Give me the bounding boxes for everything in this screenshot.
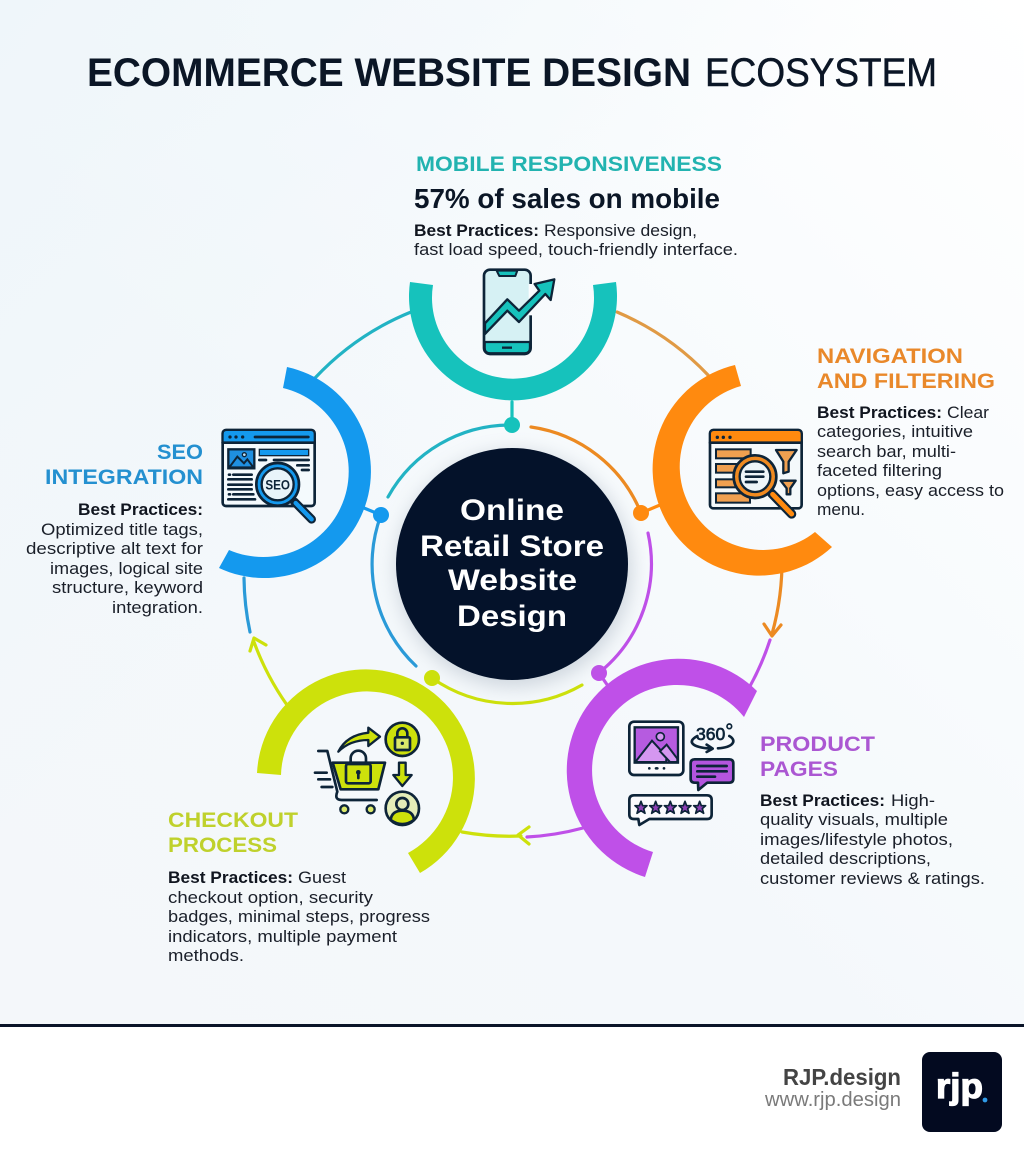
icon: SEO browser window: SEO [265,476,290,492]
panel: checkout process text: CHECKOUT [168,809,298,832]
panel: checkout process text [168,809,430,965]
panel: navigation and filtering text: search bar, multi- [817,442,956,461]
footer [0,1024,1024,1154]
panel: navigation and filtering text: NAVIGATION [817,345,963,368]
panel: checkout process text: Best Practices: [168,868,293,887]
arc: product pages [567,659,757,877]
panel: navigation and filtering text: AND FILTERING [817,370,995,393]
icon: phone with rising chart [484,270,554,354]
panel: mobile responsiveness text: MOBILE RESPONSIVENESS [416,153,722,176]
central hub [396,448,632,687]
panel: mobile responsiveness text: fast load speed, touch-friendly interface. [414,240,738,259]
panel: SEO integration text: integration. [112,598,203,617]
panel: navigation and filtering text: options, easy access to [817,481,1004,500]
panel: navigation and filtering text: faceted filtering [817,461,942,480]
central hub: Online [460,494,564,527]
panel: product pages text [760,733,985,888]
panel: mobile responsiveness text: Best Practices: [414,221,539,240]
arc: navigation and filtering [653,365,832,576]
panel: SEO integration text: Optimized title tags, [41,520,203,539]
panel: navigation and filtering text: menu. [817,500,865,519]
arc: SEO integration [219,367,371,578]
outer connecting ring [244,312,782,844]
panel: navigation and filtering text: Best Practices: [817,403,942,422]
footer: www.rjp.design [764,1089,901,1111]
panel: SEO integration text: descriptive alt text for [26,539,203,558]
panel: checkout process text: Guest [298,868,346,887]
panel: mobile responsiveness text: 57% of sales on mobile [414,183,720,214]
icon: filter window [710,430,802,514]
panel: mobile responsiveness text [414,153,738,259]
arc: mobile responsiveness [409,282,617,400]
connector dots [373,417,649,686]
icon: secure checkout cart [315,723,419,825]
central hub: Design [457,600,567,633]
panel: product pages text: customer reviews & ratings. [760,869,985,888]
footer: RJP.design [783,1064,901,1090]
title: ECOMMERCE WEBSITE DESIGN [87,51,691,95]
panel: product pages text: Best Practices: [760,791,885,810]
panel: navigation and filtering text: categories, intuitive [817,422,973,441]
panel: checkout process text: PROCESS [168,834,277,857]
panel: navigation and filtering text: Clear [947,403,989,422]
panel: navigation and filtering text [817,345,1004,519]
panel: SEO integration text: structure, keyword [52,578,203,597]
panel: SEO integration text: Best Practices: [78,500,203,519]
panel: SEO integration text: SEO [157,441,203,464]
panel: checkout process text: checkout option, security [168,888,374,907]
arc: checkout process [257,669,475,873]
panel: checkout process text: badges, minimal steps, progress [168,907,430,926]
panel: checkout process text: indicators, multiple payment [168,927,397,946]
panel: SEO integration text: images, logical site [50,559,203,578]
panel: mobile responsiveness text: Responsive design, [544,221,697,240]
icon: product gallery: 360 [696,724,725,744]
panel: product pages text: detailed descriptions, [760,849,931,868]
panel: SEO integration text: INTEGRATION [45,466,203,489]
panel: product pages text: images/lifestyle photos, [760,830,953,849]
title: ECOSYSTEM [705,51,937,95]
central hub: Retail Store [420,530,604,563]
panel: product pages text: PRODUCT [760,733,875,756]
footer: rjp [936,1067,983,1106]
panel: product pages text: PAGES [760,758,838,781]
icon: SEO browser window [223,430,315,519]
inner connecting ring [364,402,660,703]
icon: product gallery [629,722,733,825]
panel: product pages text: quality visuals, multiple [760,810,948,829]
panel: checkout process text: methods. [168,946,244,965]
panel: product pages text: High- [891,791,935,810]
panel: SEO integration text [26,441,203,617]
central hub: Website [448,564,577,597]
